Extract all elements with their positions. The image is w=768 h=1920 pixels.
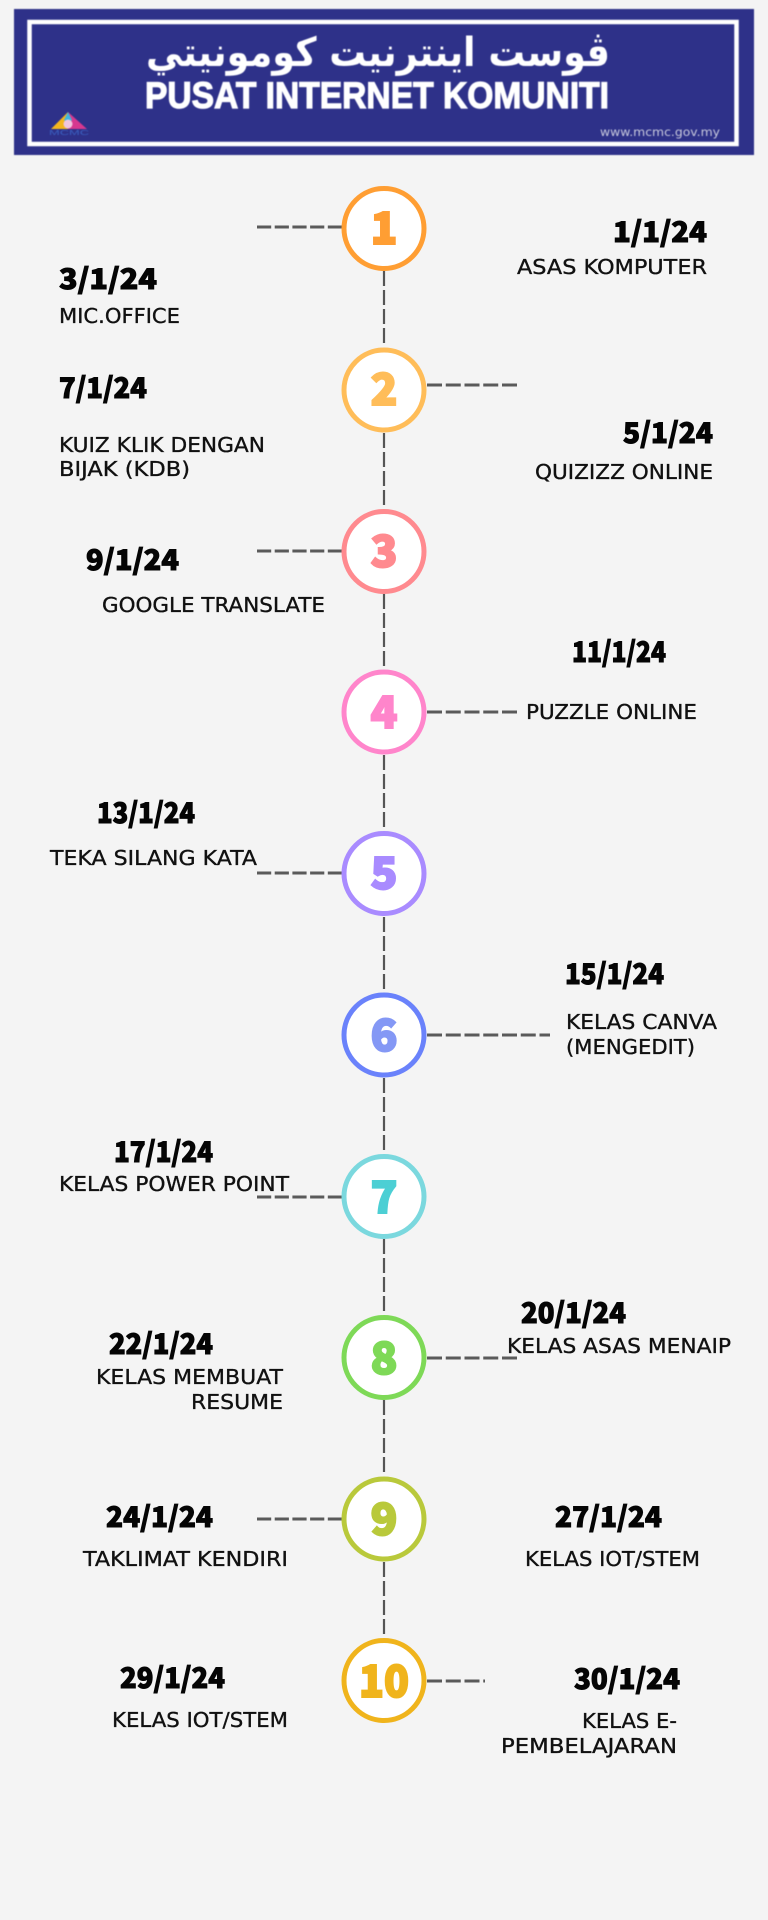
entry: 9/1/24: 9/1/24: [86, 539, 179, 579]
entry: 7/1/24: BIJAK (KDB): [59, 457, 190, 481]
node 7: 7: [371, 1162, 397, 1226]
latin title: PUSAT INTERNET KOMUNITI: [145, 75, 609, 116]
entry: 29/1/24: [112, 1657, 288, 1732]
node 9: 9: [371, 1484, 397, 1548]
entry: 30/1/24: 30/1/24: [574, 1658, 680, 1698]
entry: 13/1/24: 13/1/24: [97, 792, 195, 832]
website url: www.mcmc.gov.my: [600, 125, 720, 139]
node 8: 8: [371, 1323, 397, 1387]
node 6: 6: [371, 1000, 397, 1064]
jawi title: ڤوست اينترنيت كومونيتي: [146, 30, 610, 76]
node 9: [344, 1479, 424, 1559]
entry: 1/1/24: ASAS KOMPUTER: [517, 255, 707, 279]
entry: 30/1/24: [501, 1658, 680, 1758]
node 8: [344, 1318, 424, 1398]
entry: 27/1/24: [525, 1496, 700, 1571]
node 4: [344, 672, 424, 752]
node 5: 5: [371, 838, 397, 902]
entry: 15/1/24: [565, 953, 717, 1059]
entry: 11/1/24: PUZZLE ONLINE: [526, 700, 697, 724]
node 5: [344, 834, 424, 914]
entry: 3/1/24: [59, 258, 180, 328]
entry: 13/1/24: TEKA SILANG KATA: [49, 846, 257, 870]
entry: 20/1/24: 20/1/24: [521, 1292, 626, 1332]
icon: MCMC logo: [49, 112, 89, 137]
entry: 27/1/24: KELAS IOT/STEM: [525, 1547, 700, 1571]
entry: 11/1/24: [526, 631, 697, 724]
entry: 7/1/24: KUIZ KLIK DENGAN: [59, 433, 265, 457]
entry: 30/1/24: PEMBELAJARAN: [501, 1734, 677, 1758]
node 3: 3: [371, 516, 397, 580]
entry: 15/1/24: (MENGEDIT): [566, 1035, 695, 1059]
entry: 30/1/24: KELAS E-: [582, 1709, 677, 1733]
entry: 27/1/24: 27/1/24: [555, 1496, 662, 1536]
entry: 17/1/24: [59, 1131, 289, 1196]
entry: 24/1/24: TAKLIMAT KENDIRI: [82, 1547, 288, 1571]
entry: 7/1/24: 7/1/24: [59, 367, 147, 407]
entry: 3/1/24: MIC.OFFICE: [59, 304, 180, 328]
entry: 5/1/24: 5/1/24: [623, 412, 713, 452]
entry: 15/1/24: KELAS CANVA: [566, 1010, 717, 1034]
node 10: 10: [359, 1646, 409, 1710]
icon: MCMC logo: MCMC: [49, 130, 89, 137]
node 2: [344, 350, 424, 430]
node 7: [344, 1156, 424, 1236]
entry: 29/1/24: KELAS IOT/STEM: [112, 1708, 288, 1732]
entry: 1/1/24: [517, 211, 707, 279]
entry: 13/1/24: [49, 792, 257, 870]
entry: 22/1/24: [96, 1323, 283, 1414]
entry: 11/1/24: 11/1/24: [572, 631, 666, 671]
entry: 3/1/24: 3/1/24: [59, 258, 157, 298]
timeline spine: [383, 271, 385, 1638]
node 3: [344, 512, 424, 592]
entry: 24/1/24: [82, 1496, 288, 1571]
node 4: 4: [371, 677, 397, 741]
entry: 20/1/24: KELAS ASAS MENAIP: [507, 1334, 731, 1358]
entry: 17/1/24: 17/1/24: [114, 1131, 213, 1171]
entry: 22/1/24: RESUME: [191, 1390, 283, 1414]
entry: 29/1/24: 29/1/24: [120, 1657, 225, 1697]
entry: 24/1/24: 24/1/24: [106, 1496, 213, 1536]
node 2: 2: [371, 354, 397, 418]
node 6: [344, 995, 424, 1075]
entry: 7/1/24: [59, 367, 265, 481]
entry: 9/1/24: [86, 539, 325, 617]
entry: 22/1/24: KELAS MEMBUAT: [96, 1365, 283, 1389]
entry: 1/1/24: 1/1/24: [613, 211, 707, 251]
node 10: [344, 1640, 424, 1720]
entry: 9/1/24: GOOGLE TRANSLATE: [102, 593, 325, 617]
entry: 5/1/24: [535, 412, 713, 484]
node 1: 1: [371, 193, 397, 257]
entry: 15/1/24: 15/1/24: [565, 953, 664, 993]
connector dashes: [257, 227, 550, 1681]
entry: 5/1/24: QUIZIZZ ONLINE: [535, 460, 713, 484]
node 1: [344, 188, 424, 268]
entry: 17/1/24: KELAS POWER POINT: [59, 1172, 289, 1196]
entry: 20/1/24: [507, 1292, 731, 1358]
entry: 22/1/24: 22/1/24: [109, 1323, 213, 1363]
header banner: [14, 9, 754, 155]
